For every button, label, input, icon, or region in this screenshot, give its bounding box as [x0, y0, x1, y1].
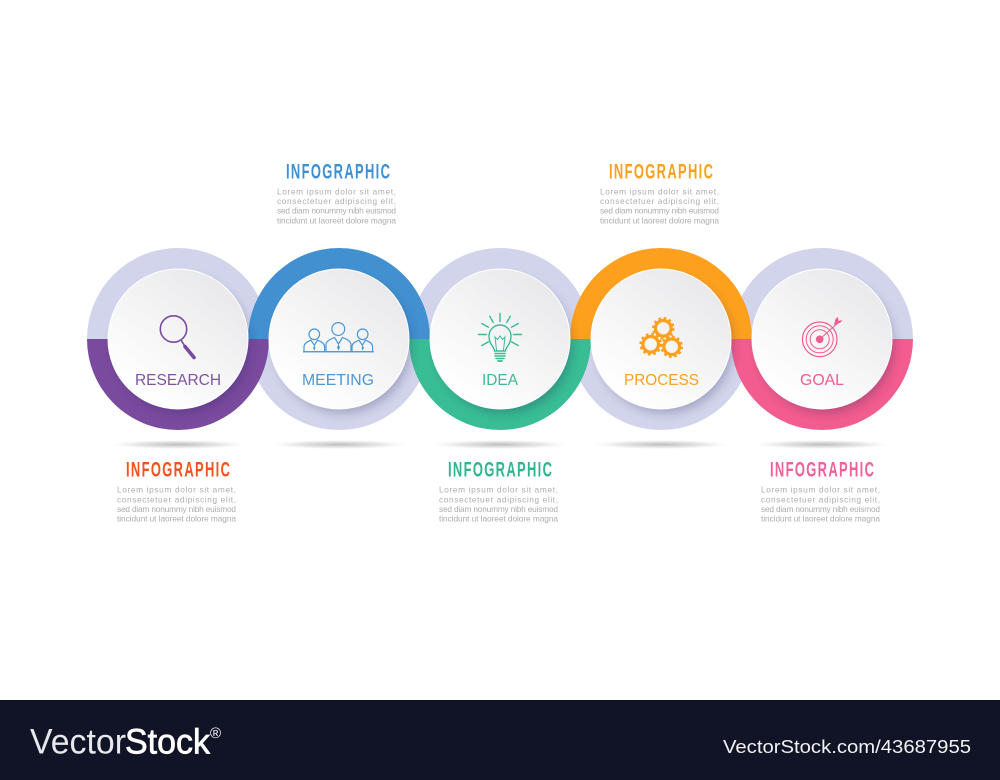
body: green block copy — [439, 485, 558, 524]
icon: light bulb — [478, 314, 522, 361]
footer url: VectorStock.com/43687955 — [723, 737, 971, 757]
heading: orange infographic: INFOGRAPHIC — [609, 159, 713, 183]
body: green block copy: tincidunt ut laoreet dolore magna — [439, 514, 558, 524]
step: goal — [752, 269, 894, 413]
body: blue block copy: tincidunt ut laoreet dolore magna — [277, 215, 396, 225]
body: green block copy: consectetuer adipiscing elit, — [439, 494, 558, 504]
step: idea — [430, 269, 572, 413]
body: pink block copy: tincidunt ut laoreet dolore magna — [761, 514, 880, 524]
label: research: RESEARCH — [135, 372, 221, 389]
step: meeting — [269, 269, 411, 413]
icon: three business people — [303, 323, 374, 352]
text block: idea — [439, 457, 558, 524]
label: process: PROCESS — [624, 372, 699, 389]
body: green block copy: sed diam nonummy nibh euismod — [439, 504, 558, 514]
text block: process — [600, 159, 719, 225]
footer logo: VectorStock: ® — [210, 725, 221, 742]
heading: green infographic: INFOGRAPHIC — [448, 457, 552, 482]
label: goal: GOAL — [800, 372, 844, 389]
body: blue block copy — [277, 186, 396, 225]
body: red block copy: sed diam nonummy nibh euismod — [117, 504, 236, 514]
text block: goal — [761, 457, 880, 524]
text block: research — [117, 457, 236, 524]
body: pink block copy: consectetuer adipiscing elit, — [761, 494, 880, 504]
body: orange block copy — [600, 186, 719, 225]
text block: meeting — [277, 159, 396, 225]
body: orange block copy: sed diam nonummy nibh euismod — [600, 206, 719, 216]
step: research — [108, 269, 250, 413]
heading: blue infographic: INFOGRAPHIC — [286, 159, 390, 183]
body: pink block copy: sed diam nonummy nibh euismod — [761, 504, 880, 514]
icon: target with arrow — [802, 317, 842, 357]
coloured half rings — [87, 248, 913, 430]
body: red block copy: tincidunt ut laoreet dolore magna — [117, 514, 236, 524]
icon: gears — [641, 318, 682, 357]
icon: magnifying glass — [160, 316, 194, 358]
body: red block copy — [117, 485, 236, 524]
ground shadows — [110, 440, 890, 449]
body: pink block copy: Lorem ipsum dolor sit amet, — [761, 485, 880, 495]
footer logo: VectorStock — [30, 722, 221, 762]
body: orange block copy: Lorem ipsum dolor sit amet, — [600, 186, 719, 196]
lavender half rings — [87, 248, 913, 430]
footer logo: VectorStock: Vector — [30, 722, 126, 762]
label: meeting: MEETING — [302, 372, 374, 389]
step: process — [591, 269, 733, 413]
body: pink block copy — [761, 485, 880, 524]
footer bar — [0, 700, 1000, 780]
body: red block copy: Lorem ipsum dolor sit amet, — [117, 485, 236, 495]
heading: red infographic: INFOGRAPHIC — [126, 457, 230, 482]
label: idea: IDEA — [482, 372, 519, 389]
body: blue block copy: consectetuer adipiscing elit, — [277, 196, 396, 206]
body: orange block copy: consectetuer adipiscing elit, — [600, 196, 719, 206]
body: blue block copy: Lorem ipsum dolor sit amet, — [277, 186, 396, 196]
footer logo: VectorStock: Stock — [125, 722, 210, 762]
body: orange block copy: tincidunt ut laoreet dolore magna — [600, 215, 719, 225]
body: green block copy: Lorem ipsum dolor sit amet, — [439, 485, 558, 495]
body: red block copy: consectetuer adipiscing elit, — [117, 494, 236, 504]
body: blue block copy: sed diam nonummy nibh euismod — [277, 206, 396, 216]
heading: pink infographic: INFOGRAPHIC — [770, 457, 874, 482]
